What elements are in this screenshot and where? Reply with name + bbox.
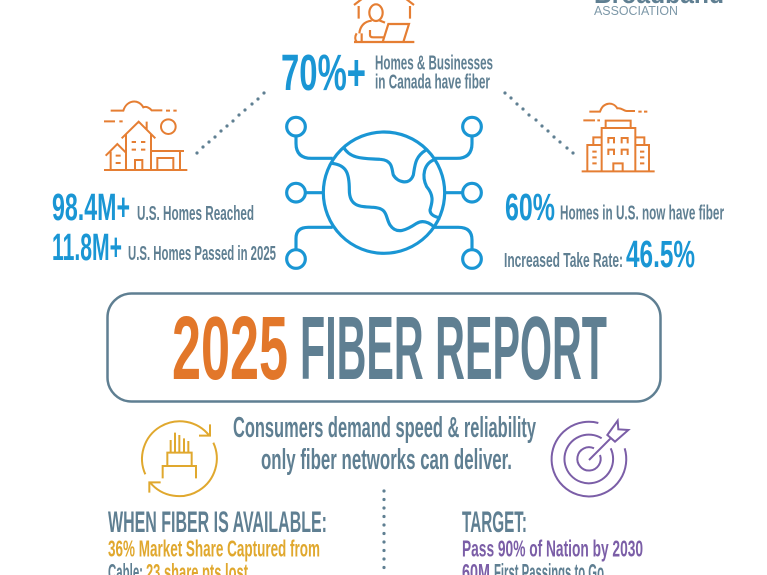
- panel: when fiber is available: [108, 506, 327, 575]
- subheading: only fiber networks can deliver.: [261, 444, 512, 476]
- panel: target: Pass 90% of Nation by 2030: [462, 536, 643, 562]
- stat: 70%+ homes and businesses in Canada: in Canada have fiber: [375, 72, 490, 94]
- icon: fiber optic cable cycle: [142, 421, 217, 496]
- subheading: [233, 412, 536, 476]
- stat: 98.4M+ US homes reached: U.S. Homes Reached: [137, 203, 254, 225]
- logo: Broadband Association: [594, 0, 724, 18]
- panel: target: TARGET:: [462, 506, 527, 539]
- dotted connector: right: [503, 91, 575, 155]
- panel: target: [462, 506, 643, 575]
- dotted connector: left: [195, 91, 266, 155]
- icon: connected globe: [287, 117, 481, 268]
- stat: 70%+ homes and businesses in Canada: [281, 44, 493, 101]
- subheading: Consumers demand speed & reliability: [233, 412, 536, 444]
- stat: 98.4M+ US homes reached: 98.4M+: [52, 187, 130, 229]
- dotted divider: [382, 489, 386, 569]
- panel: when fiber is available: WHEN FIBER IS AVAILABLE:: [108, 506, 327, 539]
- stat: 70%+ homes and businesses in Canada: Homes & Businesses: [375, 52, 493, 74]
- title panel: 2025: [172, 299, 288, 399]
- icon: target with arrow: [552, 421, 628, 496]
- stat: increased take rate: Increased Take Rate:: [504, 250, 623, 272]
- stat: 11.8M+ US homes passed: [52, 227, 276, 269]
- panel: when fiber is available: 36% Market Share Captured from: [108, 536, 320, 562]
- logo: Broadband Association: ASSOCIATION: [594, 4, 678, 18]
- stat: 60% homes in US: 60%: [505, 187, 555, 229]
- stat: 98.4M+ US homes reached: [52, 187, 254, 229]
- stat: increased take rate: [504, 234, 695, 276]
- title panel: [108, 294, 660, 402]
- stat: increased take rate: 46.5%: [626, 234, 695, 276]
- icon: office building: [582, 104, 655, 171]
- stat: 70%+ homes and businesses in Canada: 70%+: [281, 44, 366, 101]
- icon: suburban house: [104, 102, 187, 170]
- icon: person working at laptop in home: [354, 0, 414, 42]
- stat: 11.8M+ US homes passed: 11.8M+: [52, 227, 122, 269]
- stat: 11.8M+ US homes passed: U.S. Homes Passed in 2025: [128, 243, 276, 265]
- stat: 60% homes in US: [505, 187, 724, 229]
